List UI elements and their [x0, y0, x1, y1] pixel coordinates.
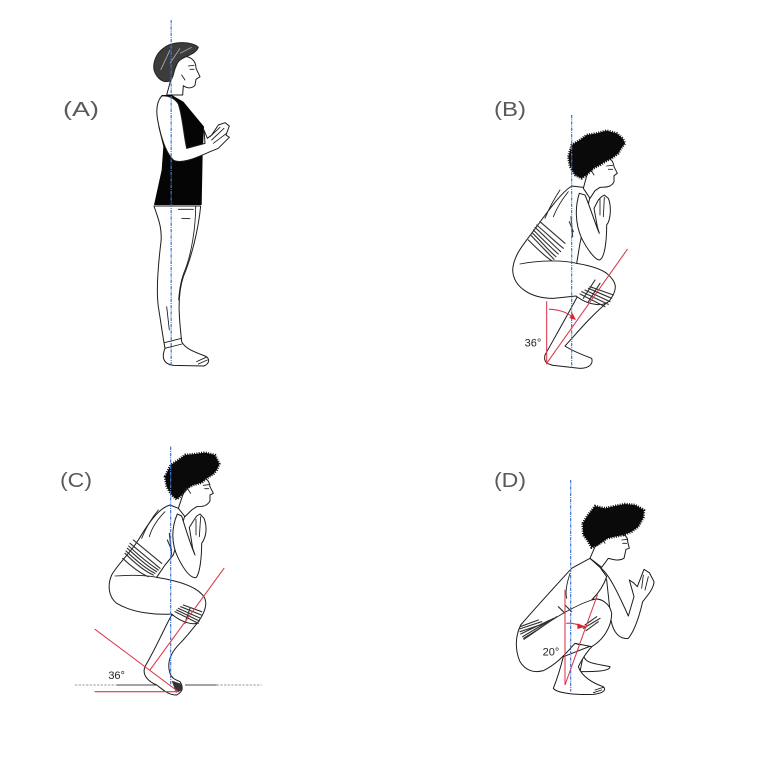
- arm and hands: [173, 514, 206, 578]
- curly hair: [568, 131, 625, 178]
- angle value: 36°: [108, 670, 125, 682]
- hair: [154, 43, 198, 82]
- label A: (A): [63, 99, 99, 121]
- torso and thigh: [513, 186, 615, 305]
- lower legs and foot: [545, 297, 610, 368]
- curly hair: [583, 504, 644, 548]
- figure C: squat with heels raised: [75, 447, 262, 695]
- fabric folds: [528, 222, 613, 307]
- red angle arc: [549, 309, 573, 318]
- shin and near foot: [553, 645, 605, 694]
- label D: (D): [494, 470, 526, 492]
- angle value: 36°: [525, 338, 541, 350]
- vertical plumb line: [570, 115, 573, 368]
- head and neck: [590, 534, 629, 567]
- red angle lines: [547, 249, 627, 363]
- figure D: deep squat: [516, 480, 654, 694]
- head and neck: [167, 56, 200, 95]
- arm and hands: [576, 193, 610, 260]
- far foot: [580, 655, 610, 672]
- vertical plumb line: [569, 480, 572, 692]
- black tank top: [154, 95, 204, 205]
- head and neck: [178, 478, 213, 517]
- arm and hands: [600, 567, 654, 638]
- head and neck: [583, 158, 617, 198]
- red angle lines: [565, 590, 597, 685]
- red angle arc: [567, 623, 582, 626]
- fabric folds: [123, 540, 202, 623]
- legs: [154, 206, 209, 366]
- angle value: 20°: [543, 646, 559, 658]
- red angle lines: [95, 568, 224, 692]
- label B: (B): [494, 99, 526, 121]
- fabric folds: [519, 605, 600, 639]
- vertical plumb line: [169, 447, 172, 687]
- curly hair: [165, 453, 219, 499]
- horizontal floor line: [75, 683, 262, 686]
- arm and hands: [157, 96, 229, 161]
- vertical plumb line: [169, 20, 173, 365]
- torso and thigh: [516, 558, 612, 672]
- figure B: squat with heels down: [513, 115, 627, 368]
- label C: (C): [60, 470, 92, 492]
- lower leg and raised foot: [144, 615, 198, 695]
- figure A: standing upright: [154, 20, 229, 366]
- torso and thigh: [109, 505, 206, 624]
